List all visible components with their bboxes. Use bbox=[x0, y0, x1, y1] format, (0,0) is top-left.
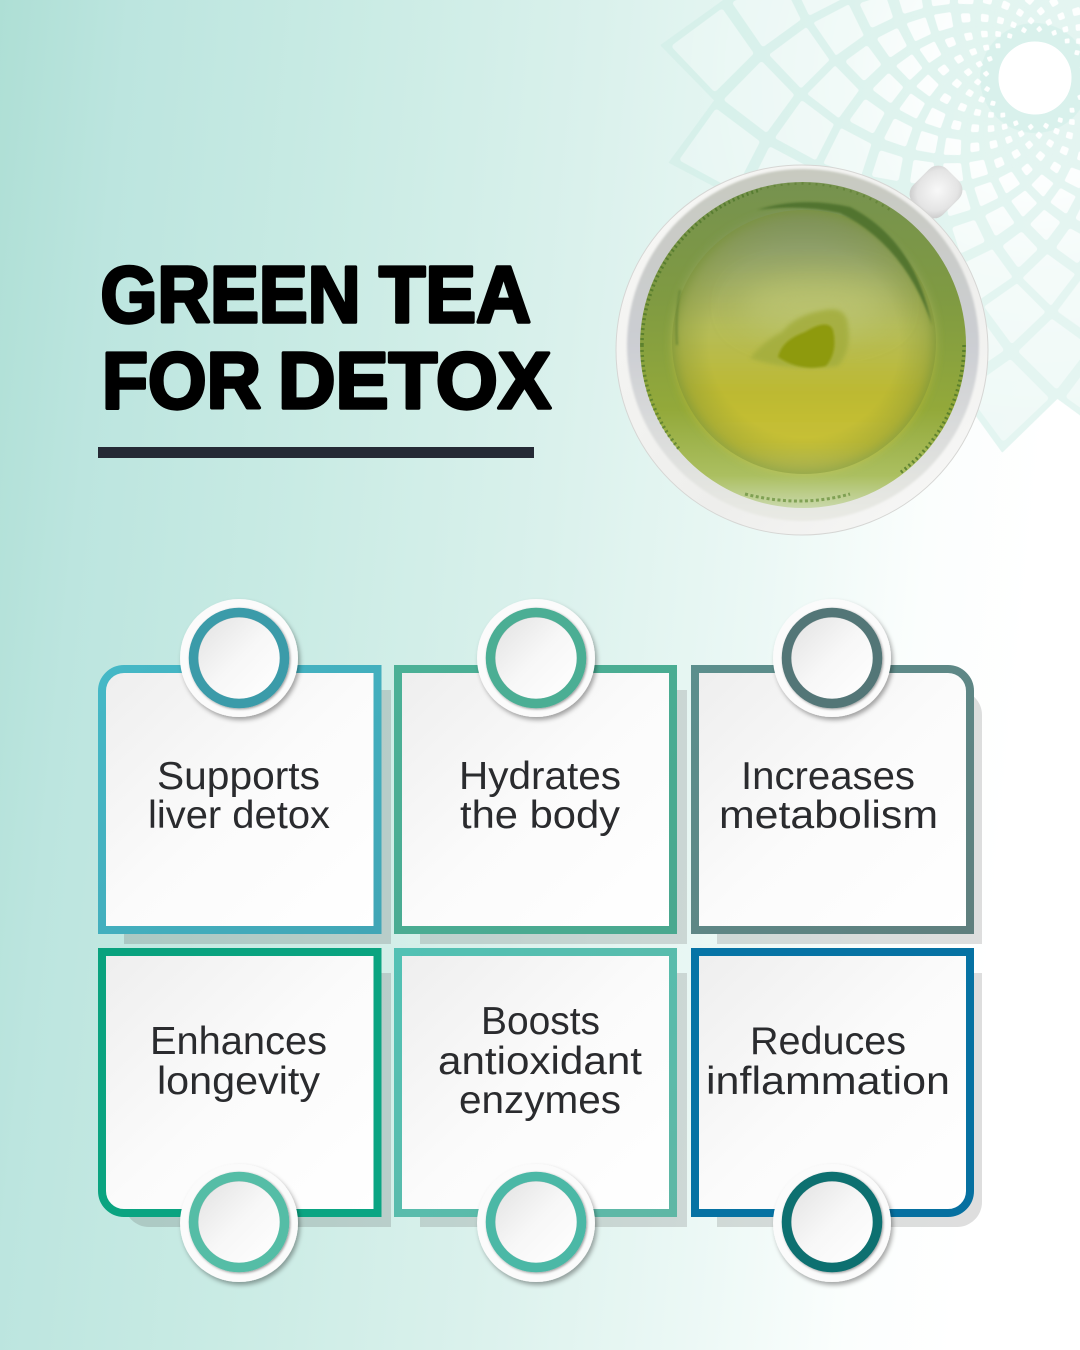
cup inner wall bbox=[627, 169, 979, 521]
reflection blob halo bbox=[750, 309, 849, 368]
card label bbox=[148, 755, 330, 837]
panel: boosts antioxidant enzymes bbox=[398, 952, 687, 1282]
title: DETOX bbox=[278, 336, 551, 425]
card label: Boosts bbox=[481, 1000, 600, 1043]
card label: metabolism bbox=[719, 794, 938, 837]
card label bbox=[719, 755, 938, 837]
title bbox=[100, 250, 551, 425]
tea pool bbox=[674, 212, 934, 472]
reflection blob bbox=[778, 324, 834, 368]
panel: increases metabolism bbox=[695, 599, 982, 944]
card frame bbox=[102, 669, 378, 930]
card label: liver detox bbox=[148, 794, 330, 837]
card label: longevity bbox=[157, 1060, 321, 1103]
card frame bbox=[398, 669, 673, 930]
icon badge bbox=[773, 599, 891, 717]
pool edge shading bbox=[672, 210, 936, 474]
card label: antioxidant bbox=[438, 1040, 642, 1083]
card shadow bbox=[420, 973, 687, 1227]
card label: Reduces bbox=[750, 1020, 906, 1063]
icon badge bbox=[477, 599, 595, 717]
cup body bbox=[616, 165, 988, 535]
title: TEA bbox=[379, 250, 531, 339]
title underline bbox=[98, 447, 534, 458]
card label bbox=[438, 1000, 642, 1122]
card label: Increases bbox=[741, 755, 915, 798]
icon badge bbox=[477, 1164, 595, 1282]
panel: supports liver detox bbox=[102, 599, 391, 944]
card shadow bbox=[717, 973, 982, 1227]
tea surface bbox=[640, 182, 966, 508]
icon badge bbox=[180, 599, 298, 717]
card label: enzymes bbox=[459, 1079, 621, 1122]
card shadow bbox=[420, 690, 687, 944]
panel: enhances longevity bbox=[102, 952, 391, 1282]
card label: the body bbox=[460, 794, 621, 837]
card label: Supports bbox=[157, 755, 320, 798]
dark crescent bbox=[676, 202, 932, 345]
icon badge bbox=[180, 1164, 298, 1282]
card label bbox=[706, 1020, 950, 1103]
panel: hydrates the body bbox=[398, 599, 687, 944]
card frame bbox=[695, 669, 970, 930]
decorative mandala bbox=[650, 0, 1080, 452]
bubbles along tea edge bbox=[642, 184, 964, 501]
card shadow bbox=[124, 973, 391, 1227]
card label: Enhances bbox=[150, 1020, 327, 1063]
card frame bbox=[398, 952, 673, 1213]
cup handle bbox=[904, 160, 968, 224]
title: FOR bbox=[102, 336, 261, 425]
icon badge bbox=[773, 1164, 891, 1282]
card label: Hydrates bbox=[459, 755, 621, 798]
card shadow bbox=[124, 690, 391, 944]
panel: reduces inflammation bbox=[695, 952, 982, 1282]
card shadow bbox=[717, 690, 982, 944]
card label bbox=[150, 1020, 327, 1103]
light reflection bbox=[740, 277, 890, 333]
title: GREEN bbox=[100, 250, 360, 339]
illustration: cup of green tea bbox=[616, 160, 988, 535]
card label bbox=[459, 755, 621, 837]
card frame bbox=[102, 952, 378, 1213]
card frame bbox=[695, 952, 970, 1213]
card label: inflammation bbox=[706, 1060, 950, 1103]
